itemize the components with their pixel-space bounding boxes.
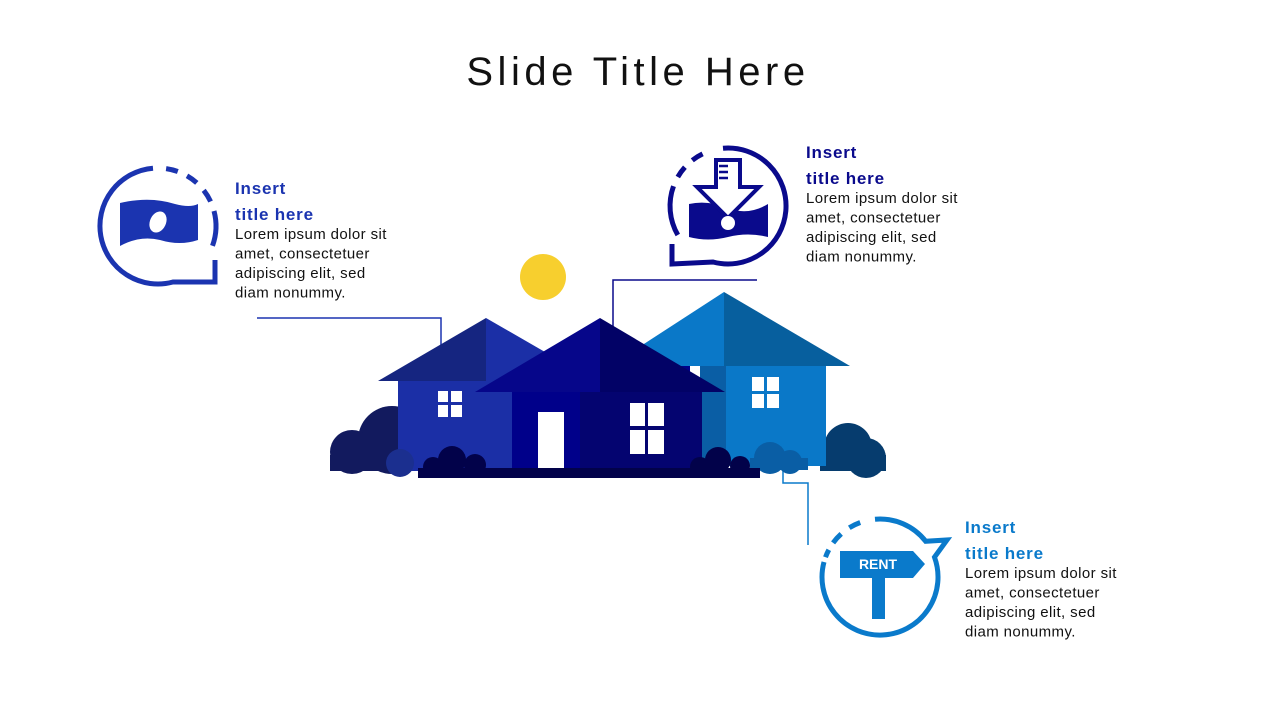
icon: download book (top)	[670, 148, 786, 264]
text: left: adipiscing elit, sed	[235, 265, 366, 282]
text: top: adipiscing elit, sed	[806, 229, 937, 246]
icon: rent sign (bottom)	[822, 519, 947, 635]
icon: rent sign (bottom): RENT	[859, 556, 897, 572]
text: left: Insert	[235, 179, 286, 198]
text: top: diam nonummy.	[806, 248, 917, 266]
text: bottom: Lorem ipsum dolor sit	[965, 565, 1117, 582]
text: bottom: title here	[965, 544, 1044, 563]
text: bottom: amet, consectetuer	[965, 584, 1100, 602]
back bushes	[330, 406, 886, 478]
text: left: title here	[235, 205, 314, 224]
icon: money flag (left)	[100, 168, 216, 284]
houses illustration	[330, 292, 886, 478]
left house	[378, 318, 545, 471]
front bushes and ground	[386, 442, 808, 478]
text: bottom: adipiscing elit, sed	[965, 604, 1096, 621]
text: top: Insert	[806, 143, 857, 162]
text: bottom	[965, 518, 1117, 640]
middle house	[475, 318, 725, 471]
right house	[610, 292, 850, 466]
text: left: Lorem ipsum dolor sit	[235, 226, 387, 243]
text: left: amet, consectetuer	[235, 246, 370, 262]
text: bottom: diam nonummy.	[965, 624, 1076, 640]
connector lines	[257, 280, 808, 545]
text: top: title here	[806, 169, 885, 188]
text: top	[806, 143, 958, 266]
text: left: diam nonummy.	[235, 284, 346, 302]
sun	[520, 254, 566, 300]
title: Slide Title Here	[466, 50, 810, 94]
text: left	[235, 179, 387, 302]
text: top: amet, consectetuer	[806, 210, 941, 226]
text: bottom: Insert	[965, 518, 1016, 537]
text: top: Lorem ipsum dolor sit	[806, 190, 958, 207]
